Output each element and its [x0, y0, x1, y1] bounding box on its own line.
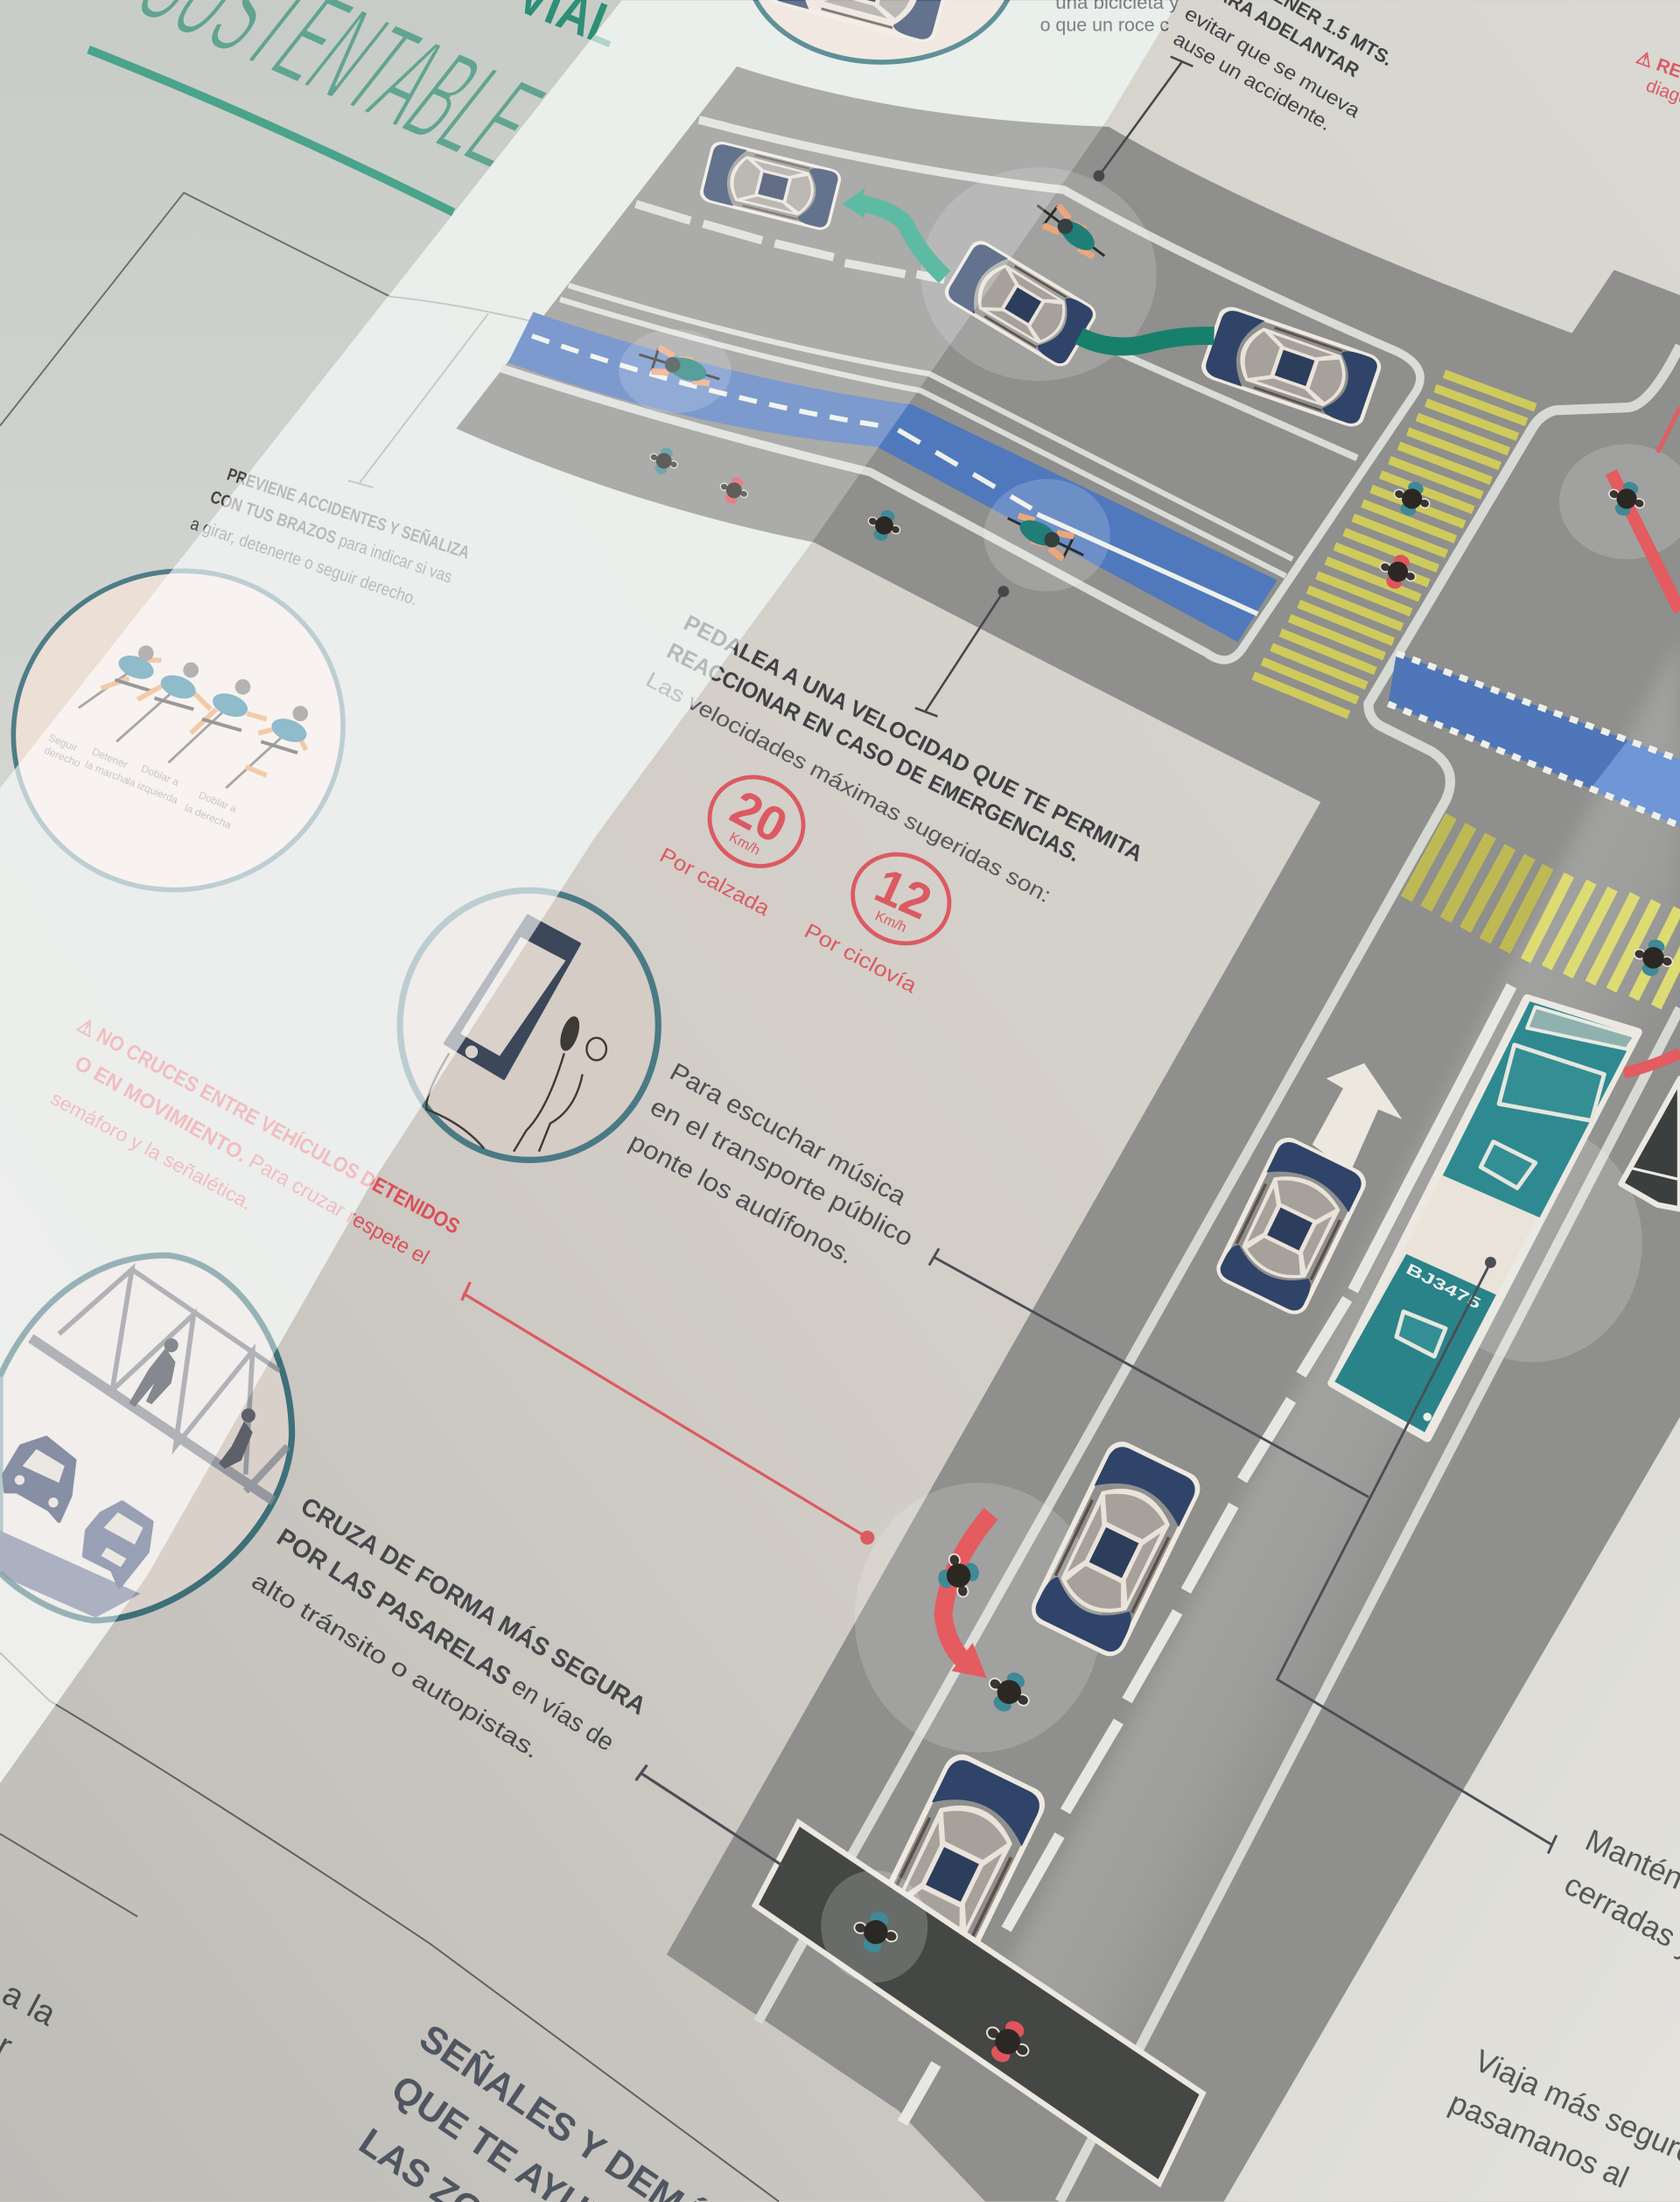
cyclist: left — [168, 679, 267, 762]
right page area, lower — [1224, 1417, 1680, 2202]
top right text — [1170, 0, 1396, 135]
bus plate: BJ3475 — [1404, 1259, 1484, 1313]
signal labels: Detener — [90, 746, 130, 771]
text: audifonos — [625, 1058, 918, 1270]
text: audifonos: ponte los audífonos. — [625, 1128, 858, 1270]
right text fragments: pasamanos al — [1444, 2086, 1634, 2195]
blue crossing — [1388, 653, 1680, 826]
circle: pedestrian bridge base — [0, 1255, 292, 1620]
signal labels: Seguir — [46, 732, 80, 754]
car under bridge: left — [4, 1438, 74, 1521]
signal labels: Doblar a — [139, 762, 181, 789]
flat text left of fold: o que un roce c — [1040, 14, 1169, 36]
warning text: no cruces: semáforo y la señalética. — [47, 1087, 256, 1214]
bike lane markings — [532, 336, 1257, 614]
text: previene accidentes: a girar, detenerte o seguir derecho. — [188, 514, 420, 610]
arrow: red bar right — [1611, 472, 1680, 611]
bridge scene — [0, 1269, 288, 1617]
flat text left of fold — [1040, 0, 1180, 36]
road markings: top block — [501, 120, 1420, 660]
second bus — [1621, 1078, 1680, 1210]
highlight circles — [619, 167, 1680, 1752]
text: audifonos: Para escuchar música — [665, 1058, 912, 1211]
car: top left — [700, 141, 841, 230]
long divider lines — [0, 1652, 779, 2202]
circle: phone and earphones — [400, 890, 658, 1160]
road fold shading — [1004, 639, 1680, 2106]
leader: phone note — [929, 1248, 1368, 1497]
top right text: evitar que se mueva — [1181, 2, 1364, 123]
cyclists — [635, 195, 1112, 566]
text: cruza pasarelas: alto tránsito o autopistas. — [247, 1567, 545, 1764]
car under bridge: right — [84, 1503, 151, 1587]
leader: signal panel — [0, 193, 535, 487]
bridge circle outline reinforcement — [0, 1255, 292, 1620]
warning text: no cruces: ⚠ NO CRUCES ENTRE VEHÍCULOS DETENIDOS — [74, 1013, 464, 1239]
leader: bus note — [1278, 1257, 1557, 1854]
text: audifonos: en el transporte público — [646, 1093, 918, 1252]
text: cruza pasarelas: POR LAS PASARELAS en vías de — [272, 1524, 619, 1757]
warning text: no cruces: O EN MOVIMIENTO. Para cruzar respete el — [70, 1051, 433, 1270]
red leader line — [462, 1282, 874, 1545]
text: pedalea: Las velocidades máximas sugeridas son: — [641, 667, 1055, 908]
signal labels: Doblar a — [197, 789, 239, 815]
road network — [456, 67, 1680, 2202]
cyclist: straight — [79, 645, 161, 708]
title underline — [88, 50, 453, 213]
pedestrians on bridge — [130, 1338, 256, 1469]
car: middle lane — [1029, 1440, 1202, 1658]
pedestrians — [646, 443, 1677, 2072]
text: pedalea: PEDALEA A UNA VELOCIDAD QUE TE PERMITA — [680, 611, 1146, 866]
leader: speed note — [915, 586, 1009, 717]
car: arrow lane — [1215, 1136, 1368, 1316]
arrow: red turn — [943, 1514, 990, 1678]
text: pedalea: REACCIONAR EN CASO DE EMERGENCIAS. — [663, 639, 1084, 867]
arrow: green overtaking left — [842, 188, 944, 277]
bus — [1332, 999, 1638, 1438]
speed sign: 12 km/h: Km/h — [872, 908, 909, 936]
arrow: red arc at bus — [1624, 1053, 1680, 1073]
signal labels: derecho — [43, 744, 82, 769]
text: previene accidentes: CON TUS BRAZOS para indicar si vas — [207, 487, 454, 587]
signal cyclists — [79, 645, 310, 788]
folded band base — [0, 0, 1179, 1784]
car: right — [1201, 305, 1382, 428]
label: por calzada: Por calzada — [655, 844, 774, 921]
bike lane — [508, 312, 1278, 642]
crosswalk: lower yellow stripes left — [1406, 816, 1548, 950]
text: previene accidentes — [188, 464, 472, 610]
signal labels: la derecha — [183, 802, 234, 831]
car: overtaking — [943, 239, 1097, 368]
cyclist: right — [226, 705, 310, 788]
top right text: ause un accidente. — [1170, 27, 1335, 135]
signal labels: la marcha — [83, 758, 131, 787]
icon: phone — [444, 915, 579, 1078]
arrow: thin red line right — [1657, 408, 1680, 452]
sidewalk edges and lanes — [758, 346, 1680, 2202]
left folded panel — [0, 0, 622, 788]
fold veil over paper — [0, 0, 1179, 1784]
crosswalk: lower yellow stripes right — [1526, 875, 1680, 1007]
signal labels: la izquierda — [125, 775, 180, 806]
top circle with car — [746, 0, 1016, 62]
right text fragments — [1444, 1823, 1680, 2195]
arrow: white straight — [1312, 1063, 1402, 1173]
text: cruza pasarelas: CRUZA DE FORMA MÁS SEGURA — [296, 1490, 652, 1721]
signal labels — [43, 732, 239, 831]
bridge truss — [31, 1269, 288, 1501]
icon: earphones — [426, 1015, 606, 1152]
label: por ciclovia: Por ciclovía — [801, 919, 921, 999]
arrow: green overtaking right — [1079, 336, 1214, 347]
speed sign: 12 km/h — [838, 839, 963, 958]
leader: bridge note — [636, 1765, 783, 1866]
road under bridge — [0, 1531, 140, 1617]
speed sign: 12 km/h: 12 — [867, 857, 940, 929]
circle: hand signals base — [0, 524, 388, 936]
speed sign: 20 km/h: Km/h — [726, 829, 763, 859]
crosswalk: upper yellow stripes — [1253, 374, 1536, 715]
speed sign: 20 km/h: 20 — [722, 779, 796, 853]
cyclist: stop — [116, 663, 211, 741]
speed sign: 20 km/h — [694, 761, 819, 882]
car: lower lane — [862, 1752, 1047, 1988]
pedestrian bridge overhead — [755, 1822, 1203, 2184]
text: previene accidentes: PREVIENE ACCIDENTES Y SEÑALIZA — [225, 464, 472, 563]
leader: overtaking note — [1094, 57, 1193, 181]
fold veil over road — [0, 0, 1179, 1784]
